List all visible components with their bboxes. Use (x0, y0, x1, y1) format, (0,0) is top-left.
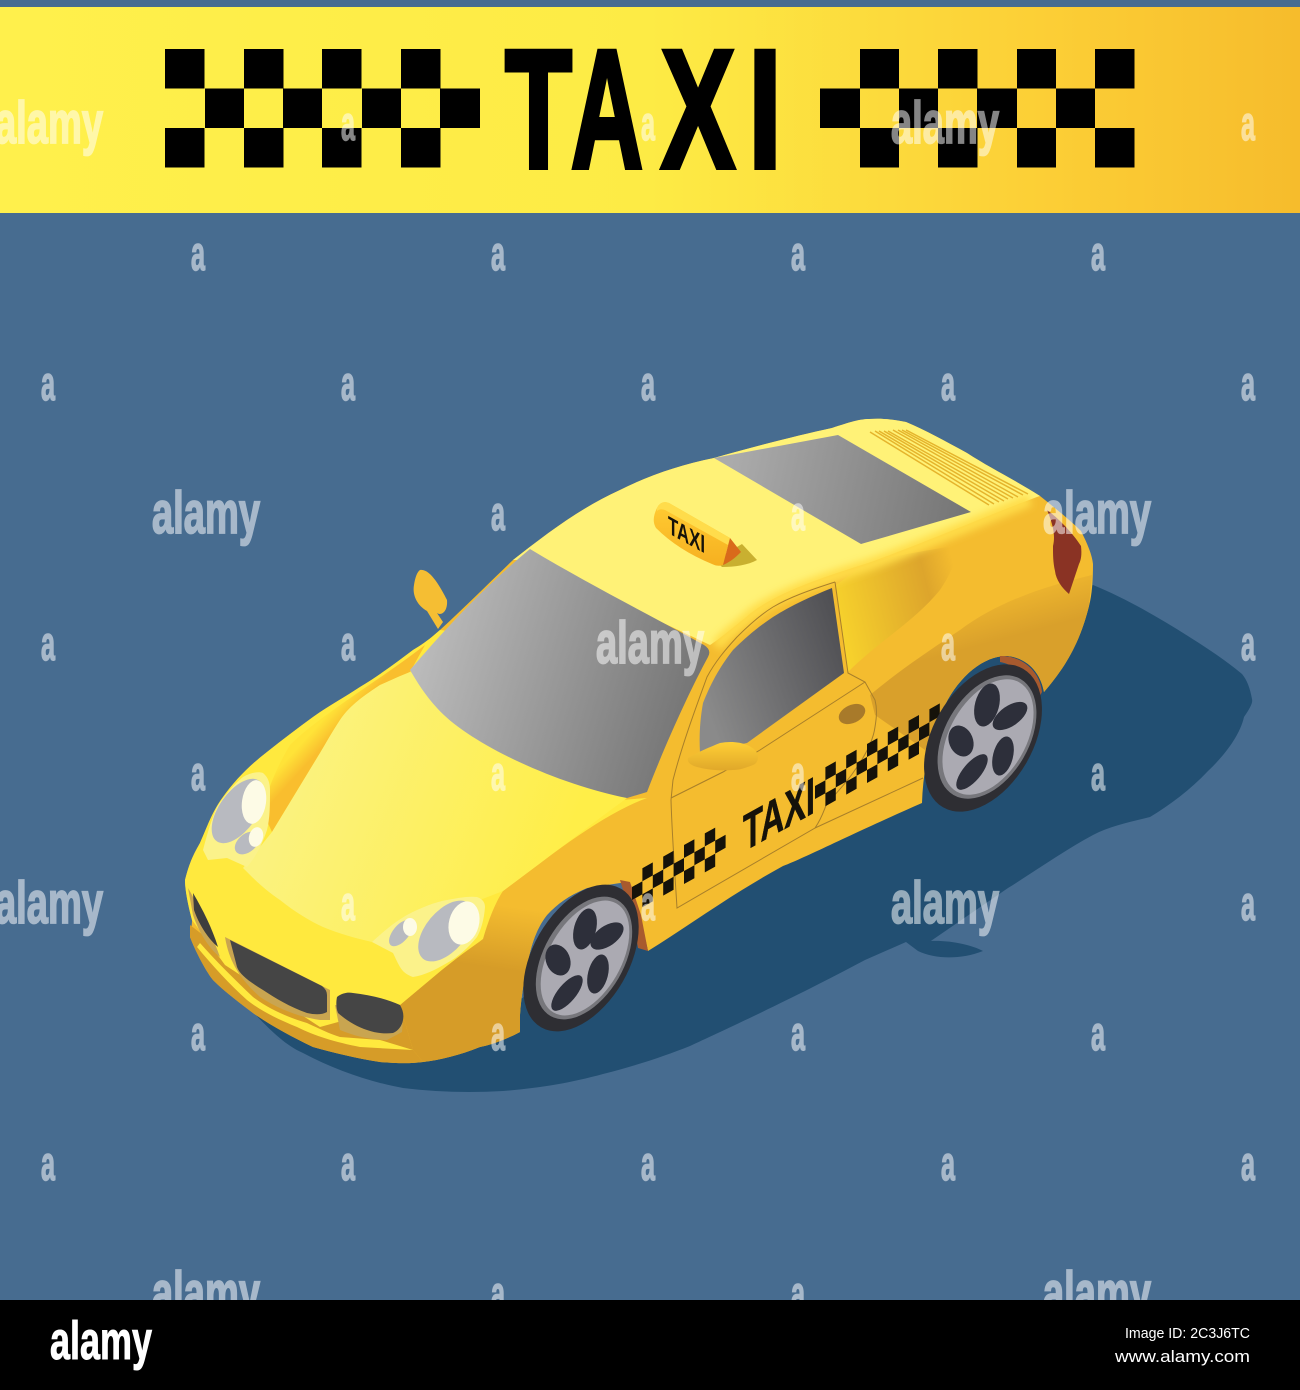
watermarks: a (341, 358, 355, 411)
side checker stripe front (632, 822, 726, 913)
door outlines (671, 582, 923, 908)
watermarks: a (791, 228, 805, 281)
watermarks: a (791, 488, 805, 541)
watermarks: alamy (596, 610, 704, 676)
watermarks: a (491, 1268, 505, 1321)
door handle (836, 700, 868, 728)
footer bar (0, 1300, 1300, 1390)
watermarks: alamy (891, 870, 999, 936)
watermarks: alamy (152, 1260, 260, 1326)
lower bumper band (190, 925, 423, 1063)
watermarks: a (1241, 98, 1255, 151)
header banner (0, 7, 1300, 213)
watermarks: a (641, 1138, 655, 1191)
watermarks: a (1241, 1138, 1255, 1191)
watermarks: alamy (152, 480, 260, 546)
watermarks: alamy (1043, 1260, 1151, 1326)
right side mirror (688, 742, 758, 770)
windshield (410, 549, 709, 798)
roof taxi sign (654, 502, 757, 567)
taxi car (185, 419, 1093, 1063)
watermarks: a (41, 358, 55, 411)
rear quarter shade (870, 575, 1092, 750)
footer logo: alamy (50, 1311, 152, 1371)
left side mirror (414, 570, 447, 629)
watermarks: a (1091, 228, 1105, 281)
watermarks: a (341, 878, 355, 931)
watermarks: a (341, 98, 355, 151)
front fender shade (400, 796, 672, 1062)
watermarks: alamy (0, 870, 103, 936)
watermarks: a (341, 618, 355, 671)
watermarks: a (41, 618, 55, 671)
watermarks: a (341, 1138, 355, 1191)
left checker pattern (165, 49, 480, 168)
front grille (188, 888, 413, 1050)
car ground shadow (253, 585, 1252, 1092)
watermarks: alamy (0, 90, 103, 156)
title: I (748, 14, 782, 204)
side TAXI lettering: TAXI (743, 765, 815, 863)
roof (513, 419, 1040, 645)
watermarks: a (941, 358, 955, 411)
front wheel (499, 865, 663, 1051)
watermarks: a (641, 98, 655, 151)
watermarks: a (191, 228, 205, 281)
watermarks: a (191, 1008, 205, 1061)
website: www.alamy.com (1114, 1347, 1250, 1366)
watermarks: a (491, 748, 505, 801)
rear wheel (900, 644, 1066, 832)
side window (700, 588, 844, 753)
watermarks: a (41, 1138, 55, 1191)
watermarks: a (791, 1008, 805, 1061)
front wheel arch (620, 880, 648, 951)
rear window (714, 435, 971, 544)
watermarks: a (1091, 1008, 1105, 1061)
watermarks: alamy (1043, 480, 1151, 546)
hood crease band (262, 645, 425, 832)
right headlight (372, 891, 485, 977)
nose and front fender (185, 630, 647, 1027)
watermarks: a (1091, 748, 1105, 801)
title (505, 14, 782, 204)
right checker pattern (820, 49, 1134, 168)
watermarks: a (941, 618, 955, 671)
watermarks: a (491, 228, 505, 281)
watermarks: a (1241, 358, 1255, 411)
rear wheel arch (1000, 656, 1042, 704)
side checker stripe rear (815, 703, 940, 812)
watermarks: a (791, 1268, 805, 1321)
image id: Image ID: 2C3J6TC (1125, 1325, 1250, 1342)
title: T (505, 14, 572, 204)
roof taxi sign: TAXI (668, 511, 705, 559)
watermarks: a (191, 748, 205, 801)
watermarks: alamy (891, 90, 999, 156)
title: X (661, 14, 735, 204)
rear quarter highlight (836, 545, 960, 672)
watermarks: a (641, 358, 655, 411)
tail light (1047, 510, 1081, 594)
hood highlight (243, 672, 627, 942)
roof edge glow (716, 500, 1030, 646)
watermarks: a (791, 748, 805, 801)
watermarks: a (941, 1138, 955, 1191)
rear deck vents (870, 430, 1028, 505)
watermarks: a (491, 488, 505, 541)
watermarks: a (1241, 618, 1255, 671)
car body (185, 419, 1093, 1063)
watermarks: a (491, 1008, 505, 1061)
watermarks: a (1241, 878, 1255, 931)
title: A (571, 14, 643, 204)
left headlight (201, 770, 275, 867)
watermarks: a (641, 878, 655, 931)
